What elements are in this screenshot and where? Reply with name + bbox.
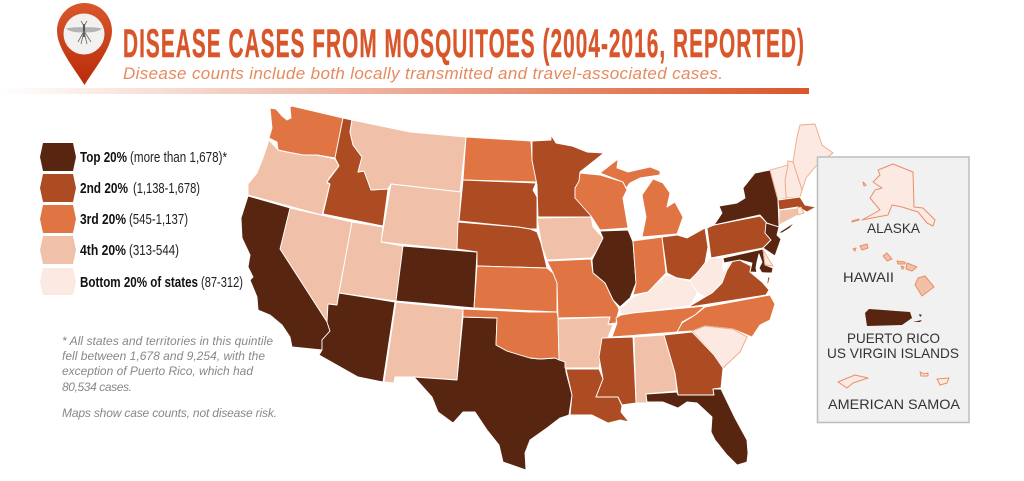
footnote: exception of Puerto Rico, which had <box>62 364 253 378</box>
legend: 3rd 20%: (545-1,137) <box>129 211 188 228</box>
Chesapeake Bay <box>756 254 762 273</box>
Indiana <box>633 237 666 295</box>
Puerto Rico and US Virgin Islands <box>865 309 922 326</box>
New Hampshire <box>785 161 802 198</box>
Oklahoma <box>463 309 559 360</box>
legend: 2nd 20%: 2nd 20% <box>80 180 128 197</box>
Nebraska <box>457 222 547 268</box>
Rhode Island <box>797 207 804 215</box>
legend: bottom 20%: Bottom 20% of states <box>80 274 198 291</box>
Pennsylvania <box>707 216 771 258</box>
Connecticut <box>779 208 798 225</box>
Alabama <box>634 335 677 403</box>
label: US Virgin Islands: US VIRGIN ISLANDS <box>827 345 959 361</box>
legend: 4th 20%: (313-544) <box>129 242 179 259</box>
legend: top 20% <box>40 143 227 171</box>
footnote <box>62 334 277 420</box>
New Mexico <box>384 302 463 383</box>
legend: 3rd 20% <box>40 205 188 233</box>
Montana <box>350 120 466 192</box>
Arkansas <box>558 317 613 368</box>
label: Alaska: ALASKA <box>867 220 921 236</box>
California <box>241 196 330 350</box>
Wyoming <box>381 184 461 250</box>
Nevada <box>280 208 352 322</box>
legend: 4th 20%: 4th 20% <box>80 242 126 259</box>
Arizona <box>319 293 395 382</box>
legend <box>40 143 243 295</box>
Virginia <box>690 257 770 307</box>
map: contiguous US states <box>241 106 833 470</box>
Michigan upper peninsula <box>600 159 660 188</box>
header rule <box>0 88 809 94</box>
subtitle: Disease counts include both locally transmitted and travel-associated cases. <box>123 64 723 83</box>
Tennessee <box>612 306 705 337</box>
Delaware <box>763 250 773 266</box>
Utah <box>339 222 403 301</box>
Idaho <box>323 118 388 226</box>
legend: 2nd 20% <box>40 174 200 202</box>
Kansas <box>474 266 557 312</box>
legend: top 20%: Top 20% <box>80 149 127 166</box>
South Carolina <box>692 326 747 368</box>
Washington <box>269 106 343 158</box>
Vermont <box>770 165 788 200</box>
Illinois <box>592 230 636 307</box>
American Samoa <box>838 372 949 388</box>
South Dakota <box>459 180 537 229</box>
New York <box>714 170 779 227</box>
Texas <box>414 317 572 470</box>
icon: map pin with mosquito <box>57 3 112 85</box>
footnote: * All states and territories in this quintile <box>62 334 273 348</box>
label: Hawaii: HAWAII <box>843 269 894 285</box>
Long Island <box>778 222 795 233</box>
Ohio <box>662 228 708 280</box>
footnote: Maps show case counts, not disease risk. <box>62 406 277 420</box>
footnote: fell between 1,678 and 9,254, with the <box>62 349 265 363</box>
Minnesota <box>532 135 604 217</box>
label: Puerto Rico: PUERTO RICO <box>847 330 940 346</box>
panel: inset territories <box>818 157 969 422</box>
legend: bottom 20% <box>40 268 243 295</box>
legend: bottom 20%: (87-312) <box>201 274 243 291</box>
Maryland <box>723 249 773 273</box>
legend: 4th 20% <box>40 236 179 264</box>
Georgia <box>664 332 723 395</box>
legend: 3rd 20%: 3rd 20% <box>80 211 126 228</box>
Michigan lower peninsula <box>642 179 683 237</box>
Colorado <box>396 246 477 308</box>
North Carolina <box>677 295 775 337</box>
West Virginia <box>690 258 737 297</box>
New Jersey <box>763 223 781 256</box>
Hawaii <box>853 244 934 296</box>
label: American Samoa: AMERICAN SAMOA <box>828 396 961 412</box>
footnote: 80,534 cases. <box>62 380 132 394</box>
legend: 2nd 20%: (1,138-1,678) <box>133 180 200 197</box>
Mississippi <box>596 337 636 405</box>
Alaska <box>852 164 935 226</box>
Florida <box>646 389 748 465</box>
Missouri <box>547 259 619 324</box>
Iowa <box>537 217 603 260</box>
Maine <box>793 124 833 190</box>
Massachusetts <box>778 197 816 212</box>
Wisconsin <box>575 173 628 230</box>
legend: top 20%: (more than 1,678)* <box>130 149 227 166</box>
North Dakota <box>463 137 537 182</box>
Kentucky <box>620 275 698 315</box>
Louisiana <box>566 369 629 423</box>
Oregon <box>248 140 339 215</box>
